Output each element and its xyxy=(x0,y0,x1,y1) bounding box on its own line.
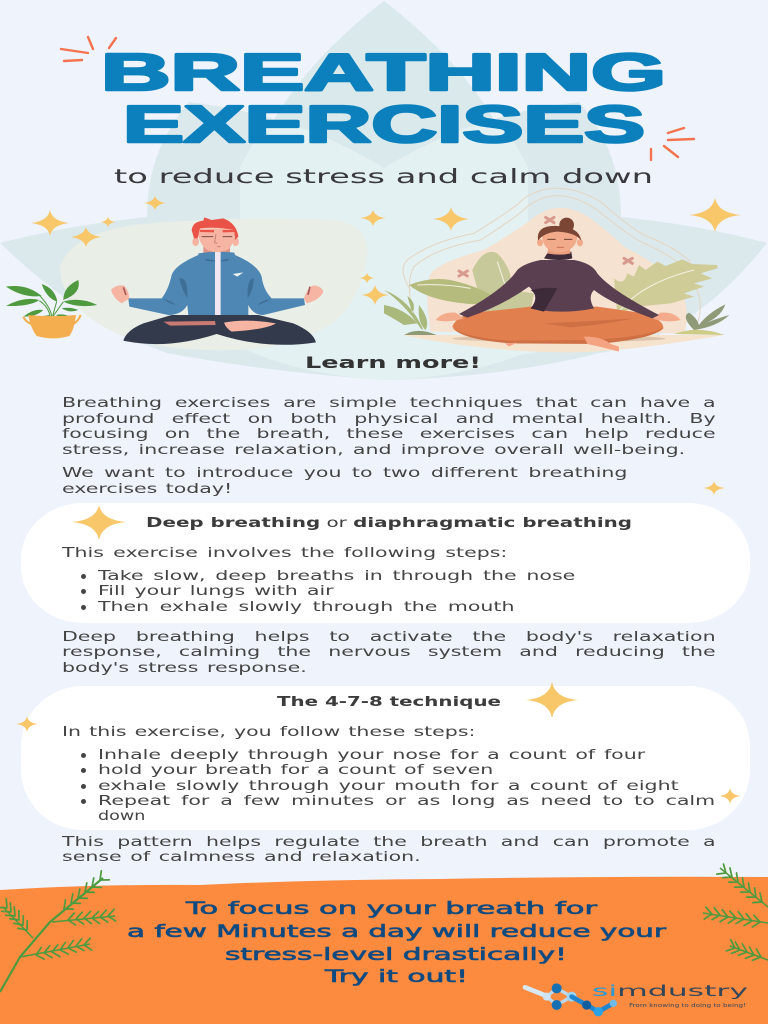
intro paragraph: focusing on the breath, these exercises can help reduce xyxy=(62,426,716,442)
title xyxy=(101,44,666,154)
4-7-8 steps xyxy=(62,724,715,824)
learn more heading: Learn more! xyxy=(305,353,481,372)
call to action: To focus on your breath for xyxy=(184,899,597,919)
card: deep breathing xyxy=(21,503,750,623)
sun rays left xyxy=(61,37,116,61)
woman meditating with leaves xyxy=(384,188,729,352)
simdustry logo: From knowing to doing to being! xyxy=(629,1003,746,1009)
intro paragraph xyxy=(62,395,716,458)
4-7-8 steps: hold your breath for a count of seven xyxy=(98,762,493,778)
fern left xyxy=(0,878,115,992)
title: BREATHING xyxy=(101,44,666,102)
4-7-8 explanation xyxy=(62,834,716,865)
man meditating xyxy=(111,217,323,345)
4-7-8 steps: Repeat for a few minutes or as long as need to to calm xyxy=(98,793,715,809)
deep breathing explanation xyxy=(62,629,716,676)
4-7-8 steps: exhale slowly through your mouth for a count of eight xyxy=(98,778,679,794)
deep breathing steps xyxy=(62,545,575,615)
deep breathing explanation: body's stress response. xyxy=(62,660,307,676)
title: EXERCISES xyxy=(123,96,645,154)
4-7-8 explanation: sense of calmness and relaxation. xyxy=(62,849,421,865)
intro paragraph: stress, increase relaxation, and improve overall well-being. xyxy=(62,442,685,458)
potted plant xyxy=(6,280,97,338)
4-7-8 steps: Inhale deeply through your nose for a count of four xyxy=(98,747,645,763)
intro second paragraph: exercises today! xyxy=(62,481,232,497)
deep breathing steps: Take slow, deep breaths in through the nose xyxy=(98,568,575,584)
sparkles on cards xyxy=(16,505,741,804)
subtitle: to reduce stress and calm down xyxy=(114,165,653,188)
4-7-8 steps: In this exercise, you follow these steps: xyxy=(62,724,475,740)
call to action xyxy=(127,899,666,987)
blob behind man xyxy=(60,218,368,350)
4-7-8 explanation: This pattern helps regulate the breath and can promote a xyxy=(62,834,716,850)
4-7-8 steps: down xyxy=(98,808,145,824)
heading: 4-7-8 technique: The 4-7-8 technique xyxy=(277,694,501,710)
fern right xyxy=(703,868,768,960)
call to action: a few Minutes a day will reduce your xyxy=(127,922,666,942)
lotus background xyxy=(0,1,767,380)
intro second paragraph xyxy=(62,465,627,497)
simdustry logo xyxy=(525,982,748,1016)
sun rays right xyxy=(651,128,694,160)
call to action: stress-level drastically! xyxy=(225,945,567,965)
intro paragraph: Breathing exercises are simple techniques that can have a xyxy=(62,395,716,411)
orange footer band xyxy=(0,877,768,1024)
deep breathing steps: Then exhale slowly through the mouth xyxy=(98,599,514,615)
simdustry logo: si mdustry xyxy=(592,982,748,1000)
card: 4-7-8 technique xyxy=(21,686,750,830)
deep breathing steps: Fill your lungs with air xyxy=(98,583,334,599)
sparkles group xyxy=(31,196,741,495)
call to action: Try it out! xyxy=(323,967,468,987)
deep breathing steps: This exercise involves the following steps: xyxy=(62,545,507,561)
intro second paragraph: We want to introduce you to two different breathing xyxy=(62,465,627,481)
intro paragraph: profound effect on both physical and mental health. By xyxy=(62,411,716,427)
heading: deep breathing: Deep breathing or diaphragmatic breathing xyxy=(146,515,632,531)
deep breathing explanation: response, calming the nervous system and reducing the xyxy=(62,644,716,660)
deep breathing explanation: Deep breathing helps to activate the body's relaxation xyxy=(62,629,716,645)
